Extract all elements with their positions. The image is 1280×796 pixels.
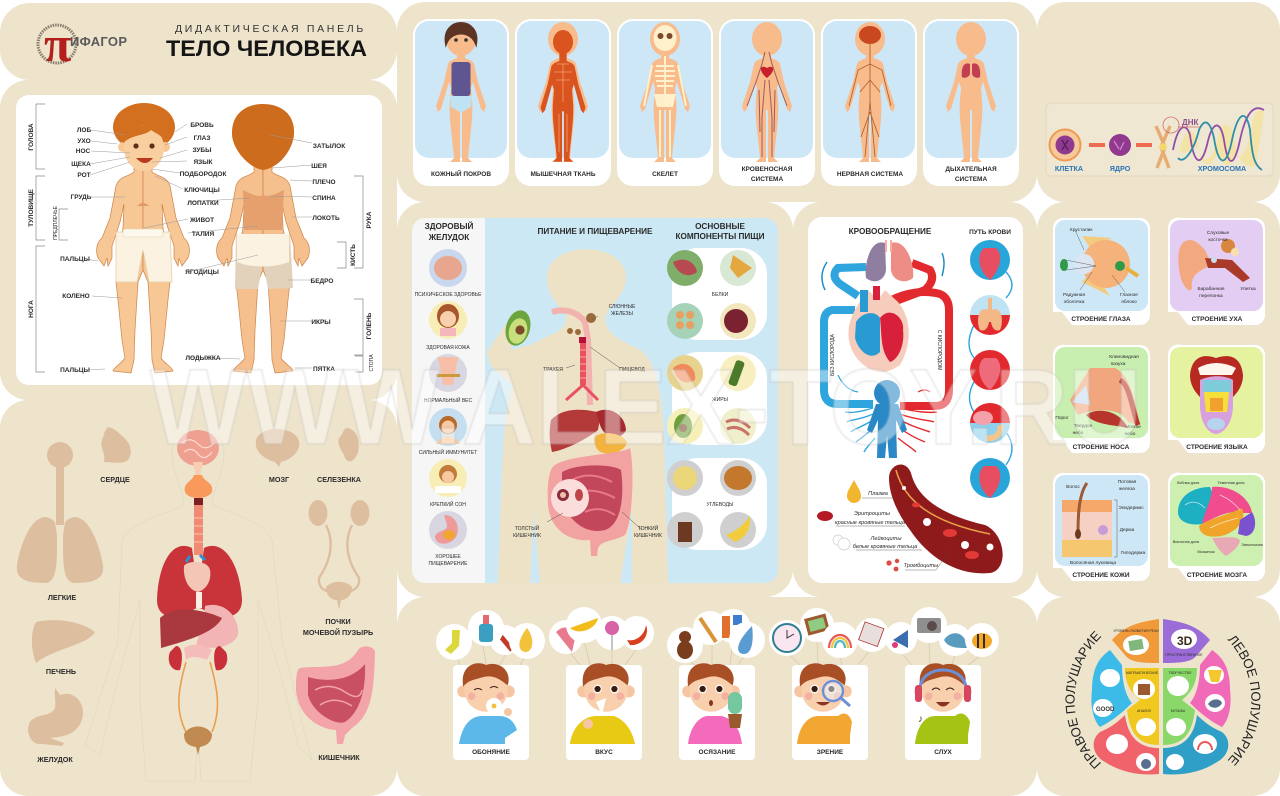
icon: child figure <box>867 380 907 458</box>
label: brain: МОЗГ <box>269 475 289 484</box>
card: eye: СТРОЕНИЕ ГЛАЗА <box>1071 316 1131 323</box>
legend: blood components: Эритроциты <box>854 511 890 517</box>
labels: digestive organs: КИШЕЧНИК <box>634 533 662 539</box>
logo: ИФАГОР <box>70 34 127 49</box>
card: sight: ЗРЕНИЕ <box>817 749 844 756</box>
balloons: sight <box>769 608 889 658</box>
labels: body parts: ЛОКОТЬ <box>312 215 340 222</box>
card: ear: Барабанная <box>1197 286 1225 292</box>
card: respiration <box>923 19 1019 186</box>
label: intestine: КИШЕЧНИК <box>318 753 360 762</box>
labels: body parts: БЕДРО <box>311 278 333 285</box>
labels: body parts: ЛОДЫЖКА <box>185 355 221 362</box>
card: skin: Потовая <box>1118 479 1137 485</box>
labels: body parts: КОЛЕНО <box>62 293 90 300</box>
card: blood system: КРОВЕНОСНАЯ <box>742 166 793 173</box>
body outline <box>85 431 312 781</box>
panel: DNA <box>1037 2 1280 202</box>
card: ear: СТРОЕНИЕ УХА <box>1192 316 1243 323</box>
food group: carbohydrates <box>667 458 767 550</box>
card: brain <box>1168 473 1265 581</box>
panel: nutrition <box>397 202 793 597</box>
labels: body parts: ГЛАЗ <box>194 135 210 142</box>
heading: nutrition: ПИТАНИЕ И ПИЩЕВАРЕНИЕ <box>537 227 653 236</box>
list: benefits: ХОРОШЕЕ <box>435 554 461 560</box>
labels: body parts: ЗУБЫ <box>193 147 211 154</box>
labels: digestive organs: КИШЕЧНИК <box>513 533 541 539</box>
food group: fats: ЖИРЫ <box>712 397 729 403</box>
labels: body parts: УХО <box>77 138 91 145</box>
list: benefits: НОРМАЛЬНЫЙ ВЕС <box>424 396 473 404</box>
panel: internal organs <box>0 400 397 796</box>
legend: blood components: Лейкоциты <box>870 535 901 542</box>
brain lobes: 3D <box>1177 634 1193 648</box>
card: smell: ОБОНЯНИЕ <box>472 749 511 756</box>
card: skeleton: СКЕЛЕТ <box>652 171 678 178</box>
card: touch: ОСЯЗАНИЕ <box>699 749 736 756</box>
watermark: WWW.ALEX-TOY.RU <box>150 346 1142 467</box>
card: respiration: СИСТЕМА <box>955 176 987 183</box>
card: skin: железа <box>1119 487 1135 492</box>
legend: blood components <box>817 480 950 571</box>
heading: food components: КОМПОНЕНТЫ ПИЩИ <box>675 232 765 241</box>
labels: cell stages: ЯДРО <box>1110 164 1131 173</box>
labels: body parts: ЗАТЫЛОК <box>313 143 345 150</box>
labels: body parts: НОС <box>76 148 91 155</box>
figure: boy back <box>217 104 309 373</box>
card: skeleton <box>617 19 713 186</box>
card: brain: Теменная доля <box>1218 481 1244 485</box>
labels: body parts: ГОЛЕНЬ <box>366 312 373 339</box>
card: nose: пазуха <box>1111 362 1126 367</box>
card: tongue <box>1168 345 1265 453</box>
icon: DNA helix <box>1163 108 1264 170</box>
food group: proteins: БЕЛКИ <box>712 292 729 298</box>
brain lobes: ПРОСТРАНСТВЕННОЕ <box>1165 653 1203 657</box>
card: brain: Мозжечок <box>1197 550 1215 554</box>
card: nose: Порог <box>1055 415 1069 421</box>
card: skin <box>1053 473 1150 581</box>
label: DNA: ДНК <box>1182 118 1198 127</box>
card: brain: СТРОЕНИЕ МОЗГА <box>1187 572 1247 579</box>
card: tongue: СТРОЕНИЕ ЯЗЫКА <box>1186 444 1248 451</box>
icon: chromosome <box>1156 126 1170 168</box>
card: hearing: ♪ <box>918 714 923 725</box>
label: left hemisphere: ЛЕВОЕ ПОЛУШАРИЕ <box>1228 636 1260 766</box>
legend: blood components: Плазма <box>868 491 888 497</box>
labels: digestive organs: ТОЛСТЫЙ <box>515 524 540 532</box>
card: ear <box>1168 218 1265 325</box>
labels: cell stages: КЛЕТКА <box>1055 164 1083 173</box>
heading: circulation: КРОВООБРАЩЕНИЕ <box>849 227 932 236</box>
panel: senses <box>397 597 1037 796</box>
labels: body parts: ПРЕДПЛЕЧЬЕ <box>53 205 59 240</box>
labels: body parts <box>28 122 375 374</box>
arrow <box>1089 143 1105 147</box>
labels: digestive organs: ЖЕЛЕЗЫ <box>611 311 634 317</box>
organs in body <box>157 430 242 755</box>
card: sight <box>792 663 868 760</box>
panel: brain hemispheres <box>1037 597 1280 796</box>
card: smell <box>453 663 529 760</box>
card: nose: небо <box>1073 430 1084 436</box>
labels: body parts: ПАЛЬЦЫ <box>60 256 90 263</box>
list: benefits: ПИЩЕВАРЕНИЕ <box>429 561 468 567</box>
balloons: taste <box>549 607 654 654</box>
brain lobes: МАТЕМАТИЧЕСКИЕ <box>1126 671 1159 675</box>
leader lines <box>86 124 312 370</box>
icon: cell <box>1050 130 1080 160</box>
card: nose: СТРОЕНИЕ НОСА <box>1073 444 1130 451</box>
card: skin: Гиподерма <box>1121 550 1145 556</box>
brain lobes: GOOD <box>1096 707 1115 713</box>
balloons: smell <box>436 610 545 660</box>
labels: digestive organs: ТОНКИЙ <box>638 524 659 532</box>
legend: blood components: Тромбоциты <box>904 563 938 569</box>
silhouette: brain <box>256 429 299 467</box>
silhouette: lungs <box>17 442 103 583</box>
legend: blood components: белые кровяные тельца <box>853 544 917 550</box>
label: with oxygen: С КИСЛОРОДОМ <box>936 330 942 370</box>
heading: healthy stomach: ЗДОРОВЫЙ <box>425 220 474 231</box>
food group: fats <box>667 352 767 445</box>
card: skin: Эпидермис <box>1118 505 1144 511</box>
silhouette: kidneys and bladder <box>308 500 370 610</box>
labels: body parts: РОТ <box>77 172 91 179</box>
labels: cell stages: ХРОМОСОМА <box>1198 164 1246 173</box>
card: skin: Дерма <box>1120 527 1135 533</box>
labels: body parts: ЩЕКА <box>71 161 91 168</box>
subtitle: ДИДАКТИЧЕСКАЯ ПАНЕЛЬ <box>175 23 366 35</box>
brain lobes: ТВОРЧЕСТВО <box>1169 671 1192 675</box>
card: skin: СТРОЕНИЕ КОЖИ <box>1072 572 1130 579</box>
label: stomach: ЖЕЛУДОК <box>36 755 73 764</box>
labels: digestive organs: ПИЩЕВОД <box>619 367 645 373</box>
labels: body parts: РУКА <box>366 211 373 228</box>
labels: body parts: ЛОПАТКИ <box>187 200 219 207</box>
heading: food components: ОСНОВНЫЕ <box>695 222 745 231</box>
label: heart: СЕРДЦЕ <box>100 475 130 484</box>
silhouette: spleen <box>338 428 359 461</box>
card: eye: Радужная <box>1063 292 1085 298</box>
card: hearing: СЛУХ <box>934 749 952 756</box>
labels: body parts: ГРУДЬ <box>71 194 92 201</box>
label: spleen: СЕЛЕЗЕНКА <box>317 475 361 484</box>
labels: body parts: ШЕЯ <box>311 163 327 170</box>
brain lobes: МУЗЫКА <box>1171 709 1186 713</box>
card: skin: КОЖНЫЙ ПОКРОВ <box>431 169 491 178</box>
card: ear: Слуховые <box>1207 230 1229 236</box>
labels: body parts: ПАЛЬЦЫ <box>60 367 90 374</box>
balloons: touch <box>667 609 765 663</box>
card: touch <box>679 663 755 760</box>
icon: heart <box>848 286 909 372</box>
panel: body systems <box>397 2 1037 202</box>
labels: body parts: ТУЛОВИЩЕ <box>28 188 35 227</box>
title: ТЕЛО ЧЕЛОВЕКА <box>166 36 367 61</box>
labels: body parts: КИСТЬ <box>350 244 357 266</box>
card: skin: Волосяная луковица <box>1070 560 1116 566</box>
panel: logo and title <box>0 3 397 80</box>
panel: body parts <box>0 80 397 400</box>
capillaries <box>845 408 875 452</box>
card: eye: оболочка <box>1064 299 1085 305</box>
brain lobes: АНАЛИЗ <box>1137 709 1151 713</box>
silhouette: heart <box>101 427 131 463</box>
card: skin: Волос <box>1066 484 1080 490</box>
card: brain: Затылочная <box>1241 543 1263 547</box>
card: eye: яблоко <box>1121 299 1137 305</box>
labels: body parts: ЯЗЫК <box>193 159 213 166</box>
card: nose: Мягкое <box>1125 424 1141 430</box>
icon: blood vessel <box>889 465 1003 573</box>
list: benefits: ЗДОРОВАЯ КОЖА <box>426 345 470 351</box>
label: lungs: ЛЕГКИЕ <box>48 593 76 602</box>
card: hearing <box>905 663 981 760</box>
label: right hemisphere: ПРАВОЕ ПОЛУШАРИЕ <box>1065 630 1102 769</box>
labels: body parts: ПОДБОРОДОК <box>180 171 226 178</box>
brain lobes <box>1091 619 1231 774</box>
digestive organs <box>547 310 642 556</box>
icon: avocado <box>502 308 534 348</box>
panel: blood circulation <box>793 202 1037 597</box>
labels: body parts: ЯГОДИЦЫ <box>185 269 219 276</box>
label: kidneys and bladder <box>303 617 373 637</box>
body silhouette <box>487 249 668 583</box>
labels: body parts: ГОЛОВА <box>28 123 35 151</box>
panel: organ structure cards <box>1037 202 1280 597</box>
labels: digestive organs <box>513 304 662 539</box>
labels: body parts: ПЯТКА <box>313 366 335 373</box>
heading: healthy stomach <box>425 220 474 242</box>
labels: body parts: КЛЮЧИЦЫ <box>184 187 220 194</box>
card: nose: Твердое <box>1074 423 1093 429</box>
logo: π <box>44 16 71 72</box>
labels: body parts: ИКРЫ <box>311 319 331 326</box>
labels: digestive organs: СЛЮННЫЕ <box>609 304 636 310</box>
labels: body parts: ПЛЕЧО <box>312 179 336 186</box>
labels: cell stages <box>1055 164 1246 173</box>
card: muscles <box>515 19 611 186</box>
card: ear: косточки <box>1208 238 1228 243</box>
legend: blood components: красные кровяные тельца <box>835 520 905 526</box>
heading: healthy stomach: ЖЕЛУДОК <box>428 233 470 242</box>
brain lobes: УРОВЕНЬ РАЗВИТИЯ РЕЧИ <box>1113 629 1159 633</box>
label: liver: ПЕЧЕНЬ <box>46 667 76 676</box>
labels: body parts: НОГА <box>28 300 35 318</box>
icon: nucleus <box>1109 134 1131 156</box>
labels: body parts: ЖИВОТ <box>189 217 214 224</box>
card: taste: ВКУС <box>595 749 613 756</box>
list: benefits <box>415 249 482 567</box>
food group: carbohydrates: УГЛЕВОДЫ <box>707 502 734 508</box>
labels: body parts: ТАЛИЯ <box>192 231 214 238</box>
card: eye: Хрусталик <box>1070 227 1093 233</box>
list: benefits: ПСИХИЧЕСКОЕ ЗДОРОВЬЕ <box>415 292 482 298</box>
labels: body parts: СТОПА <box>369 354 375 372</box>
heading: food components <box>675 222 765 241</box>
brackets <box>36 104 363 372</box>
card: muscles: МЫШЕЧНАЯ ТКАНЬ <box>530 171 596 178</box>
card: nose <box>1053 345 1150 453</box>
figure: boy front <box>97 103 189 373</box>
label: kidneys and bladder: ПОЧКИ <box>325 617 351 626</box>
card: nerves: НЕРВНАЯ СИСТЕМА <box>837 171 903 178</box>
labels: body parts: БРОВЬ <box>190 122 214 129</box>
icon: intestine <box>296 646 375 744</box>
card: nose: Клиновидная <box>1109 354 1139 360</box>
list: benefits: КРЕПКИЙ СОН <box>430 500 466 508</box>
heading: blood path: ПУТЬ КРОВИ <box>969 229 1011 236</box>
card: eye: Глазное <box>1120 292 1138 298</box>
labels: body parts: СПИНА <box>312 195 336 202</box>
card: eye <box>1053 218 1150 325</box>
card: brain: Лобная доля <box>1177 481 1199 485</box>
list: benefits: СИЛЬНЫЙ ИММУНИТЕТ <box>419 448 477 456</box>
card: blood system: СИСТЕМА <box>751 176 783 183</box>
thin strings <box>456 640 982 665</box>
label: without oxygen: БЕЗ КИСЛОРОДА <box>830 333 836 376</box>
arrow <box>1136 143 1152 147</box>
logo <box>38 16 127 72</box>
card: respiration: ДЫХАТЕЛЬНАЯ <box>945 166 997 173</box>
labels: digestive organs: ТРАХЕЯ <box>543 367 563 373</box>
card: blood system <box>719 19 815 186</box>
balloons: hearing <box>885 607 999 657</box>
card: ear: Улитка <box>1240 286 1256 292</box>
food group: proteins <box>667 248 767 340</box>
capillaries <box>898 408 937 452</box>
card: taste <box>566 663 642 760</box>
icon: lungs <box>866 240 913 281</box>
card: skin <box>413 19 509 186</box>
label: kidneys and bladder: МОЧЕВОЙ ПУЗЫРЬ <box>303 628 373 637</box>
silhouette: stomach <box>28 688 83 746</box>
card: nerves <box>821 19 917 186</box>
card: brain: Височная доля <box>1173 540 1199 544</box>
silhouette: liver <box>32 620 95 663</box>
labels: body parts: ЛОБ <box>77 127 91 134</box>
blood path circles <box>969 240 1012 498</box>
blood vessels diagram <box>822 253 949 406</box>
card: ear: перепонка <box>1199 294 1223 299</box>
card: nose: небо <box>1125 431 1136 437</box>
